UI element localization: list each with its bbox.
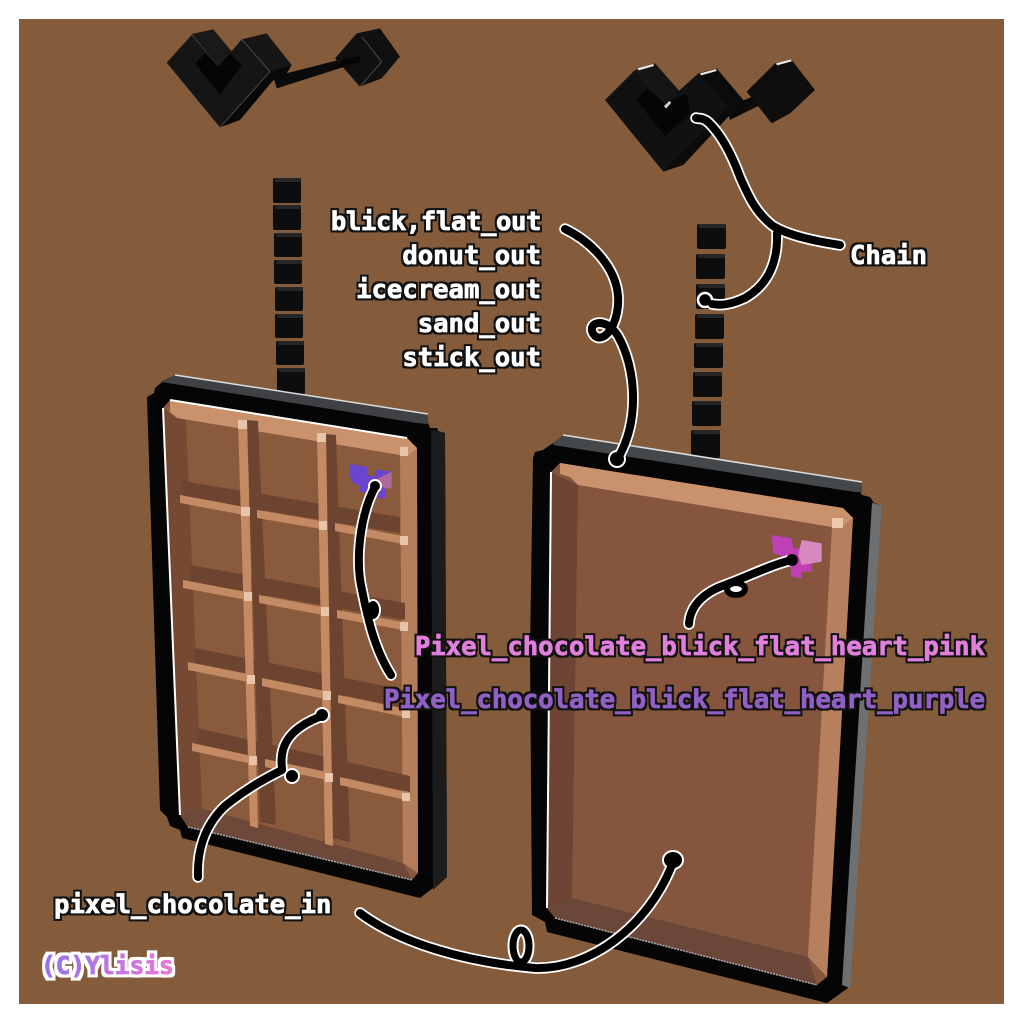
right light band bbox=[808, 518, 853, 977]
label: chocolate inner: pixel_chocolate_in bbox=[54, 890, 331, 920]
right light band bbox=[400, 447, 418, 873]
left shaded band bbox=[547, 472, 578, 918]
left shaded band bbox=[163, 408, 202, 827]
panel: right chocolate bar bbox=[530, 435, 882, 1003]
frame, left bar bbox=[147, 382, 447, 898]
light ridges bbox=[180, 420, 410, 846]
label: chain: Chain bbox=[850, 241, 927, 271]
frame, right bar bbox=[530, 443, 882, 1003]
bottom shaded band bbox=[180, 808, 412, 880]
icon: heart chain charm, left bbox=[167, 28, 400, 127]
arrow: chain callout bbox=[696, 118, 840, 307]
arrow: chocolate inner callout, left bbox=[198, 708, 329, 877]
chocolate base, left bar bbox=[163, 400, 418, 880]
label group: outer layers: icecream_out bbox=[356, 275, 541, 305]
frame top strip, right bar bbox=[553, 435, 862, 492]
white edges bbox=[547, 472, 551, 908]
credit: (C)Ylisis bbox=[41, 951, 174, 980]
white edges bbox=[163, 408, 180, 815]
label group: outer layers bbox=[331, 207, 541, 373]
label group: outer layers: stick_out bbox=[402, 343, 541, 373]
icon: heart chain charm, right bbox=[605, 59, 815, 172]
arrow: purple heart callout bbox=[359, 480, 391, 675]
label group: outer layers: donut_out bbox=[402, 241, 541, 271]
label group: outer layers: sand_out bbox=[418, 309, 541, 339]
top light band bbox=[560, 463, 853, 527]
chain beads, right bbox=[691, 224, 726, 458]
frame side, right bar bbox=[842, 503, 882, 988]
chocolate base, right bar bbox=[547, 463, 853, 985]
chain beads, left bbox=[273, 178, 305, 394]
frame side, left bar bbox=[431, 430, 447, 890]
icon: purple heart bbox=[350, 464, 392, 498]
ridge highlights bbox=[238, 420, 410, 801]
top light band bbox=[170, 400, 417, 456]
dark grooves bbox=[183, 420, 410, 842]
frame top strip, left bar bbox=[162, 375, 428, 424]
panel: left chocolate bar with grid bbox=[147, 375, 447, 898]
corner highlight bbox=[832, 518, 843, 528]
icon: pink heart bbox=[772, 535, 822, 578]
arrow: outer layer callout bbox=[565, 229, 633, 467]
bottom shaded band bbox=[547, 898, 817, 985]
arrow: chocolate inner callout, right bbox=[360, 851, 683, 968]
arrow: pink heart callout bbox=[689, 554, 798, 624]
label group: outer layers: blick,flat_out bbox=[331, 207, 541, 237]
label: purple heart: Pixel_chocolate_blick_flat_heart_purple bbox=[384, 685, 985, 715]
label: pink heart: Pixel_chocolate_blick_flat_heart_pink bbox=[415, 632, 985, 662]
